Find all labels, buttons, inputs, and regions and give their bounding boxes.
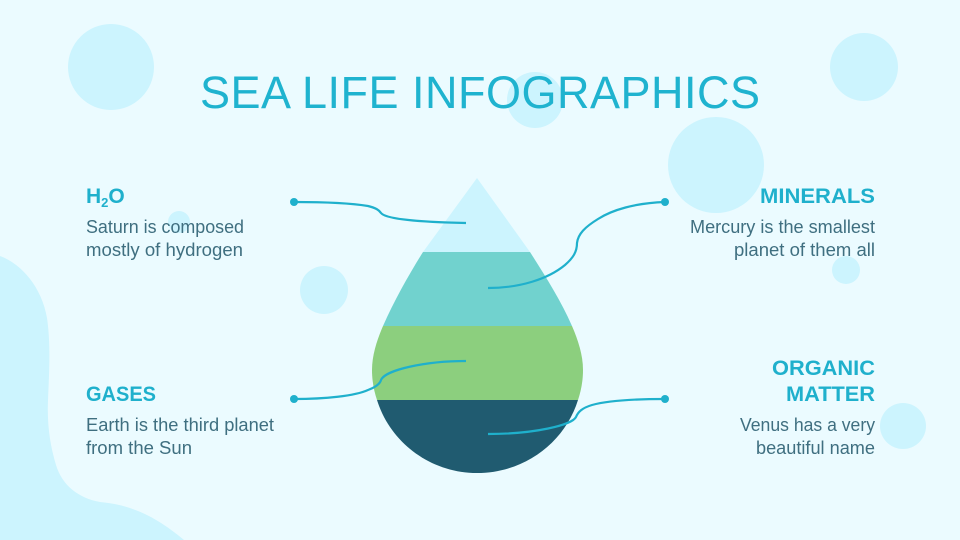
connector: H2O — [290, 198, 466, 223]
background blob shape — [0, 256, 184, 540]
heading: organic matter: ORGANIC — [772, 357, 875, 380]
description: organic matter: Venus has a very — [740, 415, 875, 435]
background bubbles — [68, 24, 926, 449]
connector: organic matter — [488, 395, 669, 434]
connector: gases — [290, 361, 466, 403]
drop layer: organic matter — [377, 400, 578, 473]
text block: gases — [86, 383, 274, 458]
water drop chart — [372, 178, 583, 473]
text block: organic matter — [740, 357, 875, 458]
heading: minerals: MINERALS — [760, 185, 875, 208]
heading: organic matter: MATTER — [786, 383, 875, 406]
description: gases: from the Sun — [86, 438, 192, 458]
drop layer: minerals — [383, 252, 572, 326]
description: gases: Earth is the third planet — [86, 415, 274, 435]
description: H2O: Saturn is composed — [86, 217, 244, 237]
text block: minerals — [690, 185, 875, 260]
heading: H2O: 2 — [101, 195, 108, 210]
description: organic matter: beautiful name — [756, 438, 875, 458]
drop layer: H2O — [423, 178, 530, 252]
description: H2O: mostly of hydrogen — [86, 240, 243, 260]
description: minerals: planet of them all — [734, 240, 875, 260]
heading: gases: GASES — [86, 383, 156, 406]
connector: minerals — [488, 198, 669, 288]
heading: H2O: H — [86, 185, 101, 208]
title: SEA LIFE INFOGRAPHICS — [200, 67, 760, 118]
description: minerals: Mercury is the smallest — [690, 217, 875, 237]
heading: H2O: O — [108, 185, 125, 208]
drop layer: gases — [372, 326, 583, 400]
text block: H2O — [86, 185, 244, 260]
